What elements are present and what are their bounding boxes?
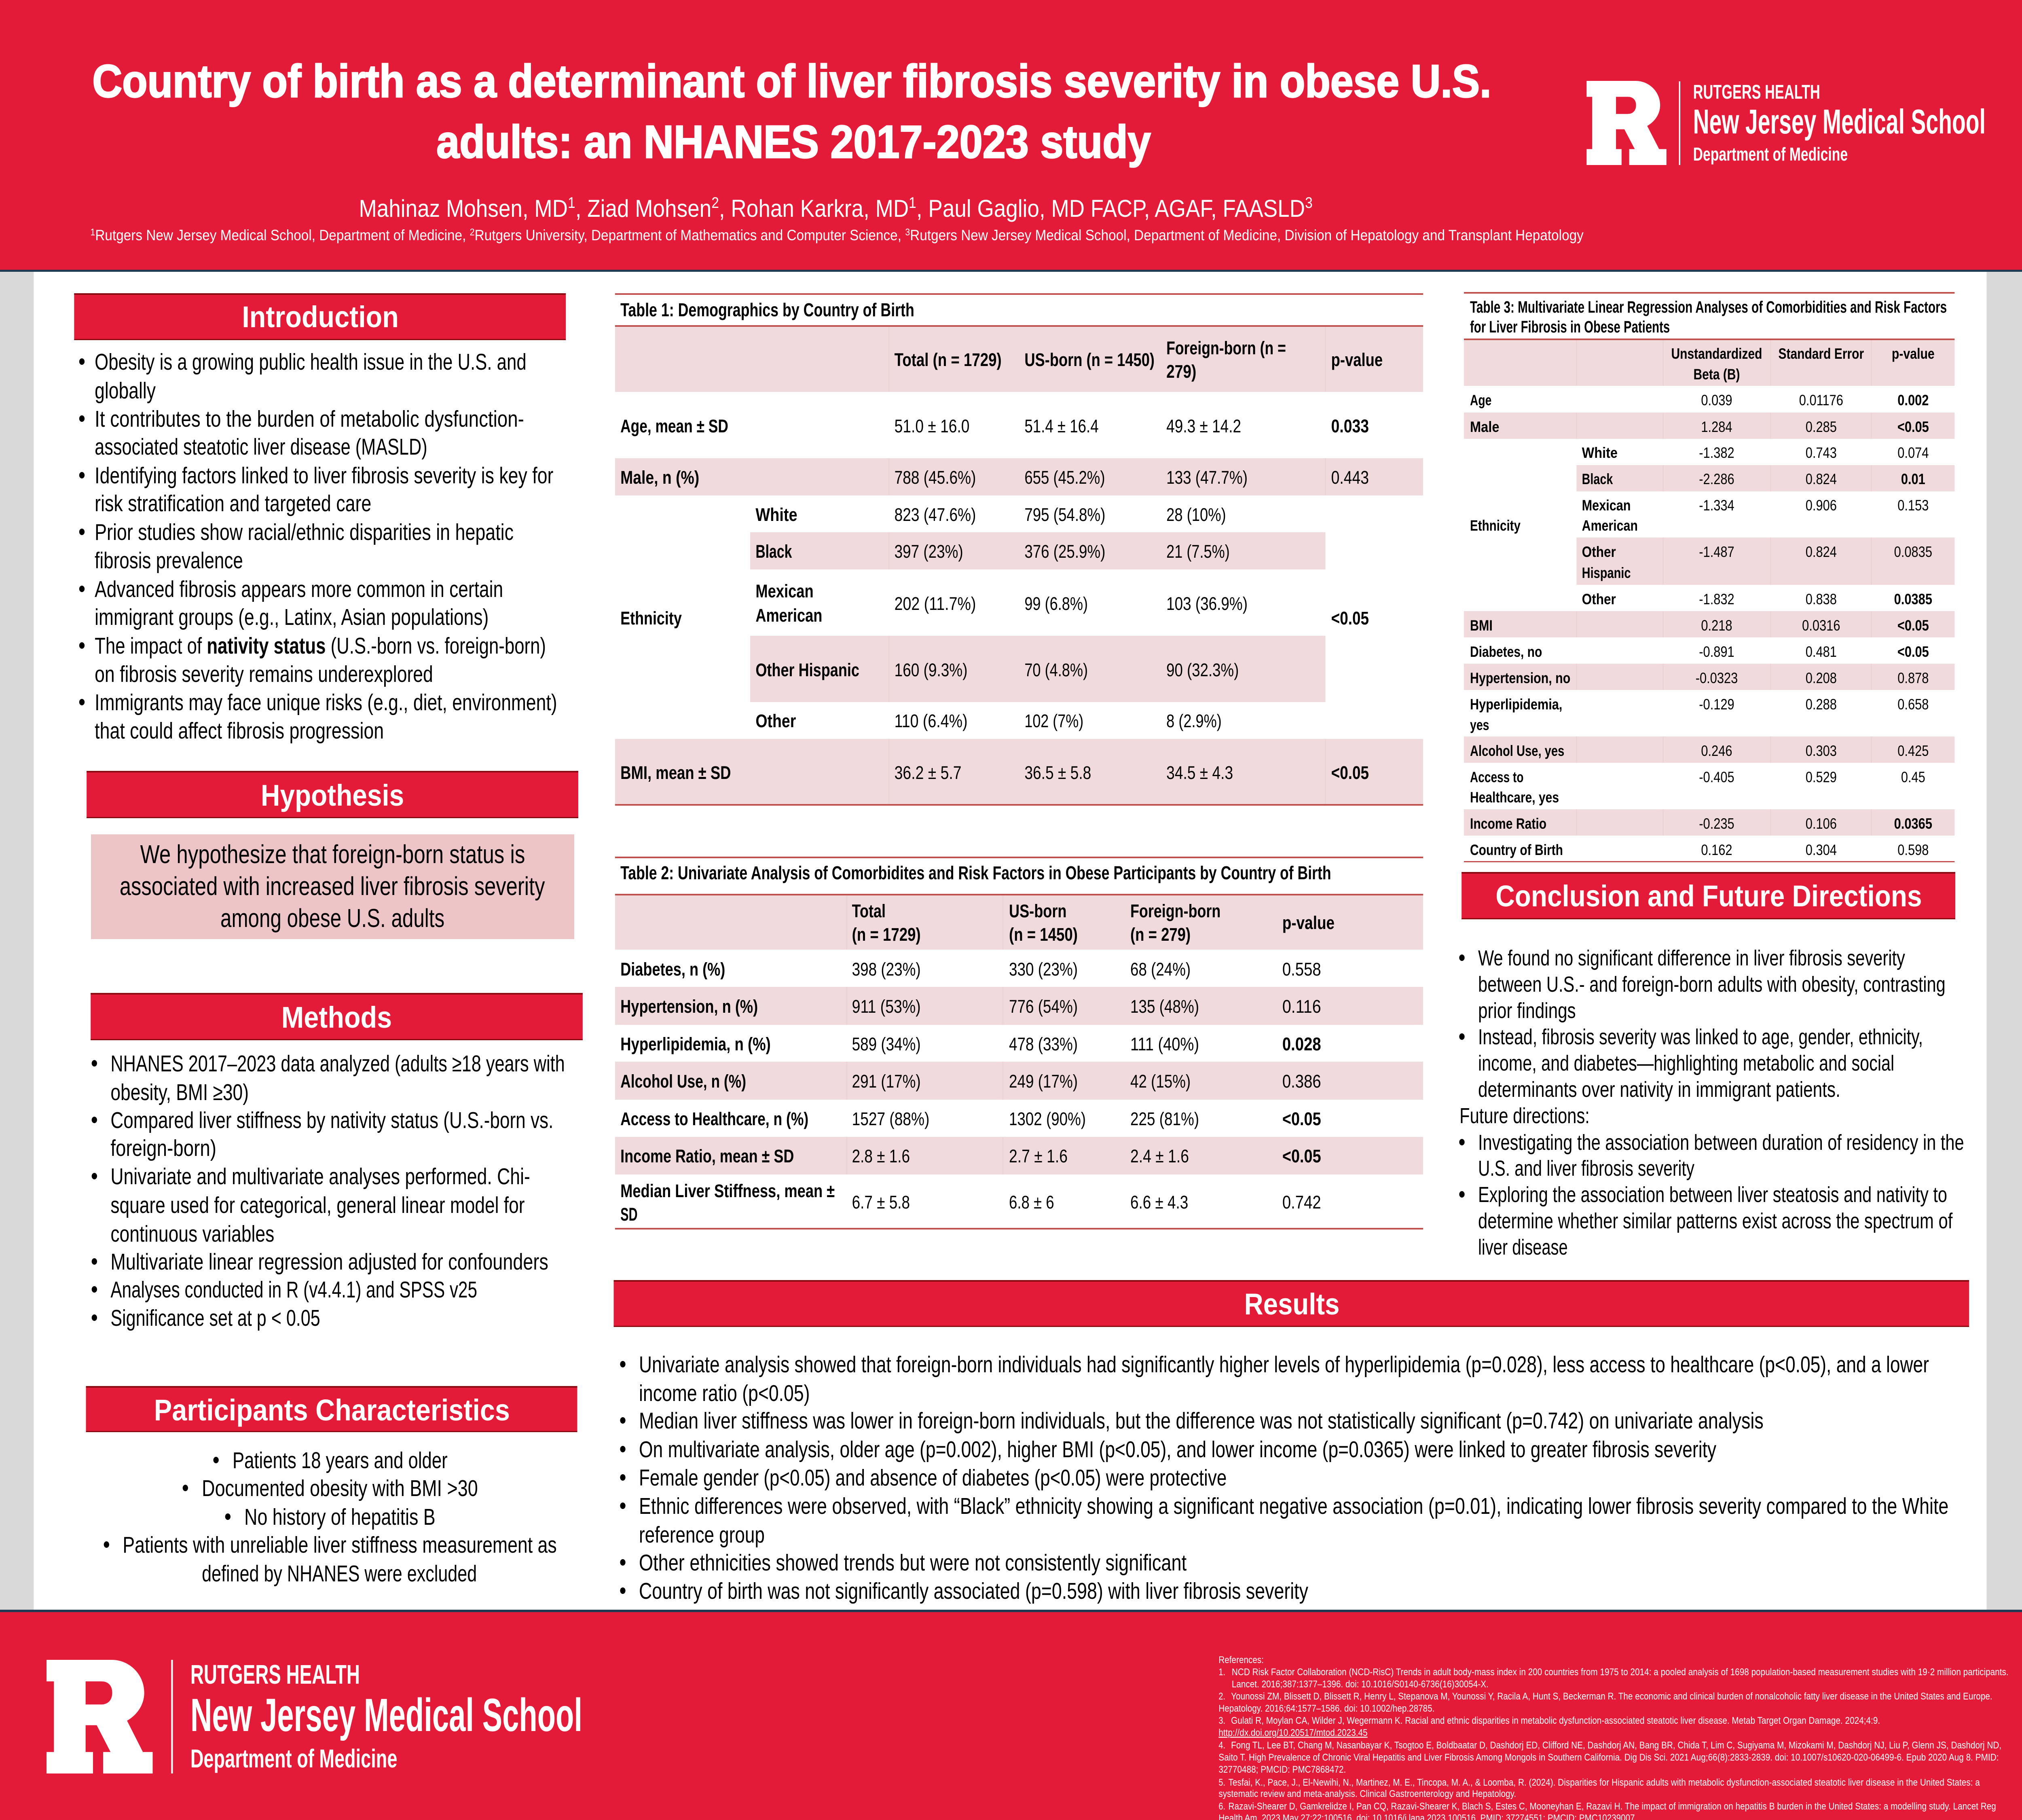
- authors: 1: [909, 194, 916, 212]
- table 2 values: 2.7 ± 1.6: [1009, 1146, 1068, 1166]
- affiliations: 1: [90, 226, 95, 237]
- table 2 header row: US-born: [1009, 901, 1067, 921]
- table 1 row labels: Other Hispanic: [755, 660, 859, 680]
- table 3 row labels: Age: [1470, 392, 1491, 409]
- text block: introduction bullets: It contributes to the burden of metabolic dysfunction-: [95, 406, 524, 432]
- table 2 values: 1527 (88%): [852, 1109, 929, 1129]
- text block: conclusion bullets: determine whether similar patterns exist across the spectrum of: [1478, 1208, 1952, 1233]
- table 3 values: <0.05: [1897, 643, 1929, 660]
- table 1 values: 788 (45.6%): [895, 468, 976, 488]
- table 1 values: 99 (6.8%): [1024, 594, 1088, 614]
- table 1 values: <0.05: [1331, 608, 1369, 629]
- text block: introduction bullets: Identifying factors linked to liver fibrosis severity is key for: [95, 463, 553, 489]
- text block: results bullets: reference group: [639, 1522, 765, 1548]
- text block: results bullets: Ethnic differences were observed, with “Black” ethnicity showing a significant negative association (p=0.01), indicating lower fibrosis severity compared to the White: [639, 1494, 1948, 1519]
- text block: participants bullets: Documented obesity with BMI >30: [202, 1476, 478, 1501]
- table 3 values: 0.208: [1806, 670, 1837, 687]
- text block: conclusion bullets: Instead, fibrosis severity was linked to age, gender, ethnicity,: [1478, 1024, 1923, 1049]
- table 3 values: <0.05: [1897, 617, 1929, 634]
- text block: references: 2.: [1218, 1691, 1225, 1701]
- table 1: demographics: [615, 293, 1423, 806]
- authors: , Ziad Mohsen: [575, 195, 711, 222]
- table 3 values: 0.0365: [1894, 815, 1932, 832]
- table 1 values: 376 (25.9%): [1024, 542, 1105, 562]
- heading: methods: Methods: [281, 1001, 392, 1034]
- text block: methods bullets: NHANES 2017–2023 data analyzed (adults ≥18 years with: [110, 1051, 565, 1077]
- table 2 values: 0.028: [1282, 1034, 1321, 1054]
- table 1 row labels: [620, 416, 859, 783]
- authors: 2: [711, 194, 719, 212]
- table 3 row labels: Access to: [1470, 769, 1524, 786]
- header banner: [0, 0, 2022, 272]
- table 1 values: 28 (10%): [1166, 505, 1226, 525]
- table 2 header row: [852, 901, 1335, 945]
- table 3 values: 0.106: [1806, 815, 1837, 832]
- table 3 values: 0.481: [1806, 643, 1837, 660]
- text block: references: systematic review and meta-analysis. Clinical Gastroenterology and Hepatology.: [1218, 1788, 1516, 1799]
- text block: introduction bullets: [79, 349, 557, 744]
- table 3 row labels: Hypertension, no: [1470, 670, 1570, 687]
- table 2 values: [852, 959, 1321, 1213]
- table 1 values: 34.5 ± 4.3: [1166, 763, 1233, 783]
- table 1 values: 0.443: [1331, 468, 1369, 488]
- table 2 values: 6.7 ± 5.8: [852, 1192, 910, 1213]
- text block: participants bullets: defined by NHANES were excluded: [202, 1561, 477, 1587]
- icon: Rutgers logo footer: RUTGERS HEALTH: [190, 1659, 360, 1690]
- table 3 title: for Liver Fibrosis in Obese Patients: [1470, 317, 1670, 336]
- icon: Rutgers logo header: Department of Medicine: [1693, 144, 1848, 165]
- text block: methods bullets: foreign-born): [110, 1136, 216, 1161]
- text block: results bullets: Female gender (p<0.05) and absence of diabetes (p<0.05) were protective: [639, 1465, 1227, 1491]
- table 3 values: -2.286: [1699, 471, 1734, 488]
- text block: methods bullets: Univariate and multivariate analyses performed. Chi-: [110, 1164, 530, 1189]
- table 2 row labels: Hypertension, n (%): [620, 997, 758, 1017]
- table 2 values: 0.386: [1282, 1071, 1321, 1092]
- table 3 header row: Standard Error: [1779, 345, 1864, 362]
- table 1 values: 36.5 ± 5.8: [1024, 763, 1091, 783]
- table 3 values: -0.891: [1699, 643, 1734, 660]
- table 3 row labels: [1470, 392, 1638, 859]
- text block: participants bullets: No history of hepatitis B: [244, 1505, 436, 1530]
- table 2 values: 249 (17%): [1009, 1071, 1078, 1092]
- table 2 values: 911 (53%): [852, 997, 921, 1017]
- table 3 values: -0.405: [1699, 769, 1734, 786]
- text block: conclusion bullets: Future directions:: [1459, 1103, 1590, 1128]
- table 2 values: 0.558: [1282, 959, 1321, 980]
- heading: hypothesis: [87, 771, 578, 818]
- text block: participants bullets: [104, 1448, 557, 1587]
- table 1 title: Table 1: Demographics by Country of Birth: [620, 300, 914, 320]
- text block: results bullets: Country of birth was not significantly associated (p=0.598) with liver fibrosis severity: [639, 1579, 1309, 1604]
- table 2 row labels: Diabetes, n (%): [620, 959, 725, 980]
- text block: references: 32770488; PMCID: PMC7868472.: [1218, 1764, 1346, 1775]
- table 3 values: 0.425: [1897, 743, 1929, 760]
- table 2 values: <0.05: [1282, 1146, 1321, 1166]
- text block: participants bullets: Patients with unreliable liver stiffness measurement as: [123, 1532, 557, 1558]
- text block: references: [1218, 1654, 2009, 1820]
- heading: results: Results: [1244, 1288, 1339, 1321]
- text block: introduction bullets: Advanced fibrosis appears more common in certain: [95, 577, 503, 602]
- text block: conclusion bullets: between U.S.- and foreign-born adults with obesity, contrasting: [1478, 972, 1946, 997]
- text block: participants bullets: Patients 18 years and older: [233, 1448, 448, 1473]
- authors: Mahinaz Mohsen, MD: [359, 195, 556, 222]
- table 3 values: 0.0316: [1802, 617, 1840, 634]
- table 2 values: <0.05: [1282, 1109, 1321, 1129]
- text block: references: 6.: [1218, 1801, 1225, 1812]
- table 1 header row: Foreign-born (n =: [1166, 338, 1286, 358]
- icon: Rutgers logo footer: Department of Medicine: [190, 1745, 398, 1773]
- text block: results bullets: [620, 1352, 1948, 1604]
- table 2 row labels: Hyperlipidemia, n (%): [620, 1034, 771, 1054]
- table 1 row labels: Age, mean ± SD: [620, 416, 728, 436]
- table 3 values: 0.824: [1806, 544, 1837, 561]
- table 1 values: 823 (47.6%): [895, 505, 976, 525]
- table 1 values: 36.2 ± 5.7: [895, 763, 962, 783]
- table 2 values: 478 (33%): [1009, 1034, 1078, 1054]
- table 3 values: 0.01: [1901, 471, 1925, 488]
- title: Country of birth as a determinant of liver fibrosis severity in obese U.S.: [92, 56, 1491, 107]
- table 1 row labels: American: [755, 605, 822, 626]
- table 2 values: 111 (40%): [1130, 1034, 1199, 1054]
- table 1 header row: US-born (n = 1450): [1024, 350, 1155, 370]
- table 1 values: 102 (7%): [1024, 711, 1083, 731]
- affiliations: Rutgers New Jersey Medical School, Department of Medicine, Division of Hepatology and Transplant Hepatology: [910, 227, 1584, 244]
- text block: introduction bullets: on fibrosis severity remains underexplored: [95, 662, 433, 687]
- affiliations: Rutgers New Jersey Medical School, Department of Medicine,: [95, 227, 470, 244]
- table 3 row labels: American: [1582, 517, 1638, 534]
- table 2 values: 6.8 ± 6: [1009, 1192, 1054, 1213]
- callout: hypothesis statement: We hypothesize that foreign-born status is: [140, 840, 525, 869]
- authors: 3: [1305, 194, 1313, 212]
- table 3 values: 0.743: [1806, 444, 1837, 461]
- table 3 row labels: Mexican: [1582, 497, 1631, 514]
- authors: , Rohan Karkra, MD: [719, 195, 909, 222]
- text block: conclusion bullets: income, and diabetes—highlighting metabolic and social: [1478, 1051, 1894, 1075]
- table 1 values: 70 (4.8%): [1024, 660, 1088, 680]
- table 1 values: 49.3 ± 14.2: [1166, 416, 1241, 436]
- table 3 values: -1.487: [1699, 544, 1734, 561]
- table 3 row labels: Country of Birth: [1470, 842, 1563, 859]
- table 3 values: 0.45: [1901, 769, 1925, 786]
- table 3 row labels: Healthcare, yes: [1470, 789, 1559, 806]
- text block: conclusion bullets: liver disease: [1478, 1235, 1568, 1259]
- table 3 values: 0.288: [1806, 696, 1837, 713]
- text block: introduction bullets: Immigrants may face unique risks (e.g., diet, environment): [95, 690, 557, 715]
- table 2 header row: (n = 1729): [852, 925, 921, 945]
- text block: references: Lancet. 2016;387:1377–1396. doi: 10.1016/S0140-6736(16)30054-X.: [1232, 1678, 1489, 1689]
- table 2 values: 6.6 ± 4.3: [1130, 1192, 1188, 1213]
- table 3 header row: p-value: [1892, 345, 1935, 362]
- text block: introduction bullets: risk stratification and targeted care: [95, 491, 371, 516]
- table 3 row labels: White: [1582, 444, 1618, 461]
- table 1 values: 795 (54.8%): [1024, 505, 1105, 525]
- icon: Rutgers logo header: RUTGERS HEALTH: [1693, 80, 1820, 103]
- table 2 values: 2.4 ± 1.6: [1130, 1146, 1189, 1166]
- table 3 row labels: Hyperlipidemia,: [1470, 696, 1562, 713]
- table 3 header row: Beta (B): [1694, 366, 1740, 383]
- text block: results bullets: Median liver stiffness was lower in foreign-born individuals, but the difference was not statistically significant (p=0.742) on univariate analysis: [639, 1408, 1764, 1434]
- affiliations: 2: [470, 226, 475, 237]
- panel: results: [614, 1280, 1969, 1604]
- table 2: univariate analysis: [615, 857, 1423, 1230]
- text block: references: 4.: [1218, 1740, 1225, 1750]
- text block: conclusion bullets: [1459, 946, 1964, 1259]
- table 1 values: 103 (36.9%): [1166, 594, 1248, 614]
- text block: references: 5.: [1218, 1777, 1225, 1788]
- callout: hypothesis statement: among obese U.S. adults: [220, 904, 444, 933]
- table 1 header row: 279): [1166, 362, 1196, 382]
- table 3 values: 1.284: [1701, 419, 1732, 436]
- table 3 values: 0.824: [1806, 471, 1837, 488]
- text block: references: 3.: [1218, 1715, 1225, 1726]
- authors: , Paul Gaglio, MD FACP, AGAF, FAASLD: [916, 195, 1305, 222]
- table 3 values: 0.218: [1701, 617, 1732, 634]
- table 1 row labels: BMI, mean ± SD: [620, 763, 731, 783]
- table 3 values: 0.658: [1897, 696, 1929, 713]
- heading: participants characteristics: Participants Characteristics: [154, 1394, 510, 1427]
- heading: methods: [91, 993, 583, 1040]
- table 3 row labels: Other: [1582, 591, 1616, 608]
- table 3 values: 0.906: [1806, 497, 1837, 514]
- table 3 title: [1470, 298, 1947, 336]
- table 2 title: Table 2: Univariate Analysis of Comorbidites and Risk Factors in Obese Participants by Country of Birth: [620, 863, 1331, 883]
- table 3 row labels: BMI: [1470, 617, 1493, 634]
- text block: methods bullets: continuous variables: [110, 1221, 274, 1247]
- table 1 row labels: White: [755, 505, 797, 525]
- table 2 values: 42 (15%): [1130, 1071, 1191, 1092]
- table 1 row labels: Male, n (%): [620, 468, 699, 488]
- text block: methods bullets: Analyses conducted in R (v4.4.1) and SPSS v25: [110, 1277, 477, 1303]
- table 2 values: 0.116: [1282, 997, 1321, 1017]
- table 3 values: 0.598: [1897, 842, 1929, 859]
- text block: conclusion bullets: prior findings: [1478, 998, 1576, 1023]
- table 2 row labels: Alcohol Use, n (%): [620, 1071, 746, 1092]
- table 2 values: 330 (23%): [1009, 959, 1078, 980]
- table 3 row labels: Male: [1470, 419, 1499, 436]
- table 2 header row: p-value: [1282, 913, 1335, 933]
- table 3 values: -0.235: [1699, 815, 1734, 832]
- table 2 row labels: Access to Healthcare, n (%): [620, 1109, 808, 1129]
- table 2 values: 2.8 ± 1.6: [852, 1146, 910, 1166]
- table 1 values: 160 (9.3%): [895, 660, 968, 680]
- table 3 values: 0.002: [1897, 392, 1929, 409]
- table 2 header row: (n = 279): [1130, 925, 1191, 945]
- table 1 values: 8 (2.9%): [1166, 711, 1222, 731]
- text block: methods bullets: square used for categorical, general linear model for: [110, 1193, 525, 1218]
- table 3 values: -1.382: [1699, 444, 1734, 461]
- table 1 values: 51.4 ± 16.4: [1024, 416, 1099, 436]
- heading: introduction: [74, 293, 566, 340]
- table 3 header row: Unstandardized: [1671, 345, 1762, 362]
- table 3 header row: [1671, 345, 1935, 383]
- table 2 header row: Total: [852, 901, 886, 921]
- table 3 row labels: Other: [1582, 544, 1616, 561]
- table 3 values: <0.05: [1897, 419, 1929, 436]
- table 3 values: 0.303: [1806, 743, 1837, 760]
- table 1 values: [895, 416, 1369, 783]
- table 3 row labels: Alcohol Use, yes: [1470, 743, 1564, 760]
- text block: introduction bullets: fibrosis prevalence: [95, 548, 243, 574]
- table 1 values: 397 (23%): [895, 542, 963, 562]
- text block: references: Gulati R, Moylan CA, Wilder J, Wegermann K. Racial and ethnic disparities in metabolic dysfunction-associated steatotic liver disease. Metab Target Organ Damage. 2024;4:9.: [1231, 1715, 1880, 1726]
- table 2 row labels: Median Liver Stiffness, mean ±: [620, 1181, 835, 1201]
- table 1 row labels: Ethnicity: [620, 608, 682, 629]
- callout: hypothesis statement: associated with increased liver fibrosis severity: [120, 872, 545, 901]
- text block: references: Fong TL, Lee BT, Chang M, Nasanbayar K, Tsogtoo E, Boldbaatar D, Dashdorj ED, Clifford NE, Dashdorj AN, Bang BR, Chida T, Lim C, Sugiyama M, Mizokami M, Dashdorj NJ, Liu P, Glenn JS, Dashdorj ND,: [1231, 1740, 2001, 1750]
- table 1 row labels: Mexican: [755, 581, 814, 601]
- table 3 values: -0.0323: [1696, 670, 1738, 687]
- text block: introduction bullets: associated steatotic liver disease (MASLD): [95, 434, 427, 460]
- text block: introduction bullets: immigrant groups (e.g., Latinx, Asian populations): [95, 605, 489, 630]
- title: [92, 56, 1491, 168]
- table 1 values: 90 (32.3%): [1166, 660, 1239, 680]
- text block: introduction bullets: Prior studies show racial/ethnic disparities in hepatic: [95, 520, 514, 545]
- table 2 values: 776 (54%): [1009, 997, 1078, 1017]
- table 3 values: 0.01176: [1799, 392, 1843, 409]
- text block: results bullets: Univariate analysis showed that foreign-born individuals had significantly higher levels of hyperlipidemia (p=0.028), less access to healthcare (p<0.05), and a lower: [639, 1352, 1929, 1378]
- table 3 values: 0.039: [1701, 392, 1732, 409]
- text block: references: Razavi-Shearer D, Gamkrelidze I, Pan CQ, Razavi-Shearer K, Blach S, Estes C, Mooneyhan E, Razavi H. The impact of immigration on hepatitis B burden in the United States: a modelling study. Lancet Reg: [1229, 1801, 1996, 1812]
- table 3 title: Table 3: Multivariate Linear Regression Analyses of Comorbidities and Risk Factors: [1470, 298, 1947, 316]
- table 3 row labels: Black: [1582, 471, 1613, 488]
- authors: 1: [568, 194, 575, 212]
- table 2 row labels: Income Ratio, mean ± SD: [620, 1146, 794, 1166]
- text block: conclusion bullets: U.S. and liver fibrosis severity: [1478, 1156, 1694, 1181]
- text block: references: NCD Risk Factor Collaboration (NCD-RisC) Trends in adult body-mass index in 200 countries from 1975 to 2014: a pooled analysis of 1698 population-based measurement studies with 19·2 million participants.: [1232, 1666, 2009, 1677]
- table 3 values: 0.0385: [1894, 591, 1932, 608]
- text block: conclusion bullets: Exploring the association between liver steatosis and nativity to: [1478, 1182, 1947, 1207]
- table 3 row labels: yes: [1470, 717, 1489, 734]
- table 3 values: 0.0835: [1894, 544, 1932, 561]
- panel: participants characteristics: [86, 1386, 577, 1587]
- panel: hypothesis: [87, 771, 578, 939]
- text block: methods bullets: [92, 1051, 565, 1331]
- table 2 values: 1302 (90%): [1009, 1109, 1086, 1129]
- text block: results bullets: income ratio (p<0.05): [639, 1381, 810, 1406]
- text block: methods bullets: obesity, BMI ≥30): [110, 1080, 249, 1105]
- table 3 values: -1.832: [1699, 591, 1734, 608]
- text block: introduction bullets: that could affect fibrosis progression: [95, 718, 384, 744]
- footer banner: [0, 1610, 2022, 1820]
- table 1 values: 21 (7.5%): [1166, 542, 1230, 562]
- table 3 values: 0.529: [1806, 769, 1837, 786]
- text block: introduction bullets: The impact of nativity status (U.S.-born vs. foreign-born): [95, 633, 546, 659]
- table 2 values: 291 (17%): [852, 1071, 921, 1092]
- text block: references: References:: [1218, 1654, 1264, 1665]
- table 1 values: 0.033: [1331, 416, 1369, 436]
- icon: Rutgers logo footer: [47, 1659, 582, 1773]
- table 3 values: 0.162: [1701, 842, 1732, 859]
- text block: references: Hepatology. 2016;64:1577–1586. doi: 10.1002/hep.28785.: [1218, 1703, 1435, 1714]
- callout: hypothesis statement: [91, 834, 574, 939]
- table 3: multivariate regression: [1464, 292, 1954, 862]
- text block: conclusion bullets: Investigating the association between duration of residency in the: [1478, 1130, 1964, 1155]
- table 2 values: 589 (34%): [852, 1034, 921, 1054]
- heading: introduction: Introduction: [242, 301, 399, 334]
- text block: methods bullets: Significance set at p < 0.05: [110, 1306, 320, 1331]
- text block: references: Younossi ZM, Blissett D, Blissett R, Henry L, Stepanova M, Younossi Y, Racila A, Hunt S, Beckerman R. The economic and clinical burden of nonalcoholic fatty liver disease in the United States and Europe.: [1231, 1691, 1992, 1701]
- text block: methods bullets: Compared liver stiffness by nativity status (U.S.-born vs.: [110, 1108, 553, 1133]
- table 1 values: 133 (47.7%): [1166, 468, 1248, 488]
- table 3 row labels: Diabetes, no: [1470, 643, 1542, 660]
- table 3 values: 0.246: [1701, 743, 1732, 760]
- table 2 values: 0.742: [1282, 1192, 1321, 1213]
- table 1 values: 51.0 ± 16.0: [895, 416, 970, 436]
- table 2 header row: (n = 1450): [1009, 925, 1078, 945]
- text block: introduction bullets: Obesity is a growing public health issue in the U.S. and: [95, 349, 527, 375]
- table 1 values: 110 (6.4%): [895, 711, 968, 731]
- table 2 row labels: SD: [620, 1204, 638, 1225]
- table 1 values: 655 (45.2%): [1024, 468, 1105, 488]
- text block: references: 1.: [1218, 1666, 1225, 1677]
- text block: methods bullets: Multivariate linear regression adjusted for confounders: [110, 1249, 548, 1275]
- table 3 row labels: Income Ratio: [1470, 815, 1546, 832]
- panel: introduction: [74, 293, 566, 744]
- table 2 header row: Foreign-born: [1130, 901, 1220, 921]
- title: adults: an NHANES 2017-2023 study: [436, 116, 1151, 168]
- table 1 row labels: Other: [755, 711, 796, 731]
- table 1 values: 202 (11.7%): [895, 594, 976, 614]
- heading: conclusion: Conclusion and Future Directions: [1495, 880, 1922, 913]
- heading: participants characteristics: [86, 1386, 577, 1432]
- text block: references: Saito T. High Prevalence of Chronic Viral Hepatitis and Liver Fibrosis Among Mongols in Southern California. Dig Dis Sci. 2021 Aug;66(8):2833-2839. doi: 10.1007/s10620-020-06499-6. Epub 2020 Aug 8. PMID:: [1218, 1752, 1999, 1763]
- table 3 values: -0.129: [1699, 696, 1734, 713]
- table 3 row labels: Ethnicity: [1470, 517, 1521, 534]
- heading: conclusion: [1462, 872, 1955, 919]
- table 3 values: 0.153: [1897, 497, 1929, 514]
- table 2 values: 135 (48%): [1130, 997, 1199, 1017]
- table 3 row labels: Hispanic: [1582, 565, 1631, 582]
- affiliations: 3: [905, 226, 910, 237]
- table 2 row labels: [620, 959, 835, 1225]
- table 2 values: 225 (81%): [1130, 1109, 1199, 1129]
- table 3 values: 0.285: [1806, 419, 1837, 436]
- panel: methods: [91, 993, 583, 1331]
- text block: conclusion bullets: We found no significant difference in liver fibrosis severity: [1478, 946, 1905, 970]
- icon: Rutgers logo header: [1586, 80, 1986, 165]
- heading: hypothesis: Hypothesis: [261, 779, 404, 812]
- table 1 header row: Total (n = 1729): [895, 350, 1002, 370]
- table 1 values: <0.05: [1331, 763, 1369, 783]
- table 1 header row: p-value: [1331, 350, 1383, 370]
- text block: references: Tesfai, K., Pace, J., El-Newihi, N., Martinez, M. E., Tincopa, M. A., & Loomba, R. (2024). Disparities for Hispanic adults with metabolic dysfunction-associated steatotic liver disease in the United States: a: [1229, 1777, 1980, 1788]
- icon: Rutgers logo footer: New Jersey Medical School: [190, 1689, 582, 1741]
- table 3 values: 0.074: [1897, 444, 1929, 461]
- table 2 values: 398 (23%): [852, 959, 921, 980]
- table 3 values: [1696, 392, 1932, 859]
- panel: conclusion and future directions: [1459, 872, 1964, 1259]
- table 3 values: 0.304: [1806, 842, 1837, 859]
- text block: results bullets: Other ethnicities showed trends but were not consistently significant: [639, 1550, 1187, 1576]
- text block: references: http://dx.doi.org/10.20517/mtod.2023.45: [1218, 1727, 1368, 1738]
- table 1 header row: [895, 338, 1383, 382]
- text block: introduction bullets: globally: [95, 378, 156, 404]
- table 2 values: 68 (24%): [1130, 959, 1191, 980]
- heading: results: [614, 1280, 1969, 1327]
- table 3 values: 0.838: [1806, 591, 1837, 608]
- table 3 values: 0.878: [1897, 670, 1929, 687]
- text block: results bullets: On multivariate analysis, older age (p=0.002), higher BMI (p<0.05), and lower income (p=0.0365) were linked to greater fibrosis severity: [639, 1437, 1717, 1462]
- table 3 values: -1.334: [1699, 497, 1734, 514]
- affiliations: Rutgers University, Department of Mathematics and Computer Science,: [475, 227, 905, 244]
- table 1 row labels: Black: [755, 542, 792, 562]
- text block: conclusion bullets: determinants over nativity in immigrant patients.: [1478, 1077, 1840, 1102]
